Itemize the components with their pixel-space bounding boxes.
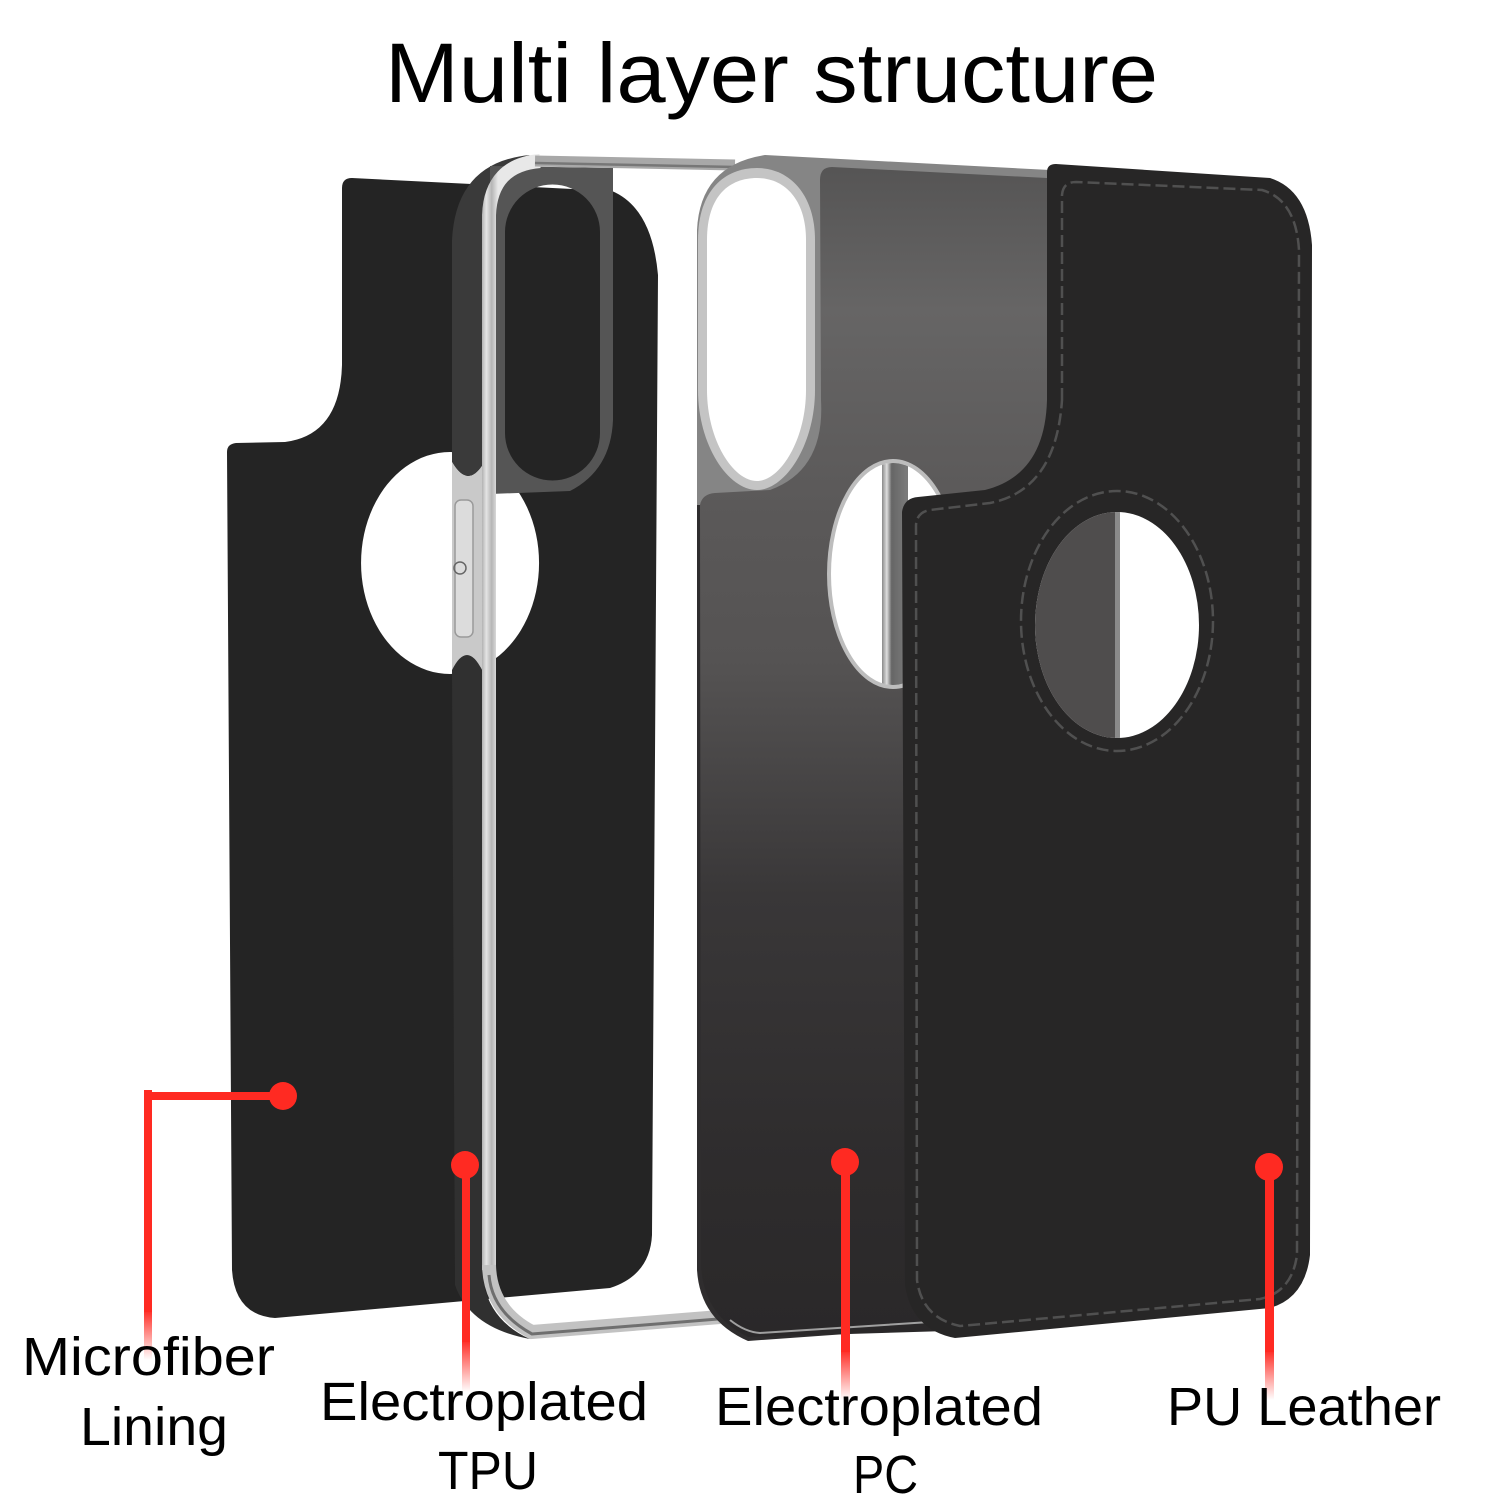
label: Electroplated TPU: TPU (438, 1441, 538, 1500)
label: Electroplated PC: Electroplated (715, 1377, 1043, 1437)
panel: PU leather layer (902, 164, 1312, 1338)
label: PU Leather: PU Leather (1167, 1377, 1441, 1437)
top rail (535, 161, 735, 165)
panel: microfiber lining layer (227, 178, 658, 1318)
camera ring hole with rail seen through (829, 461, 957, 687)
icon: power logo (454, 562, 466, 574)
round opening (1035, 512, 1199, 738)
callout: TPU pointer (451, 1151, 479, 1392)
black frame strip upper (452, 155, 530, 476)
callout: microfiber pointer (144, 1082, 297, 1360)
label: Microfiber Lining (22, 1327, 275, 1457)
label: Electroplated PC (715, 1377, 1043, 1500)
gray back panel (700, 167, 1047, 1337)
metal ring around camera cutout (698, 168, 815, 490)
label: Microfiber Lining: Lining (80, 1397, 228, 1457)
black frame strip lower (452, 655, 530, 1339)
side button (455, 500, 473, 637)
brushed metal base (697, 155, 1050, 520)
stitching (916, 182, 1299, 1326)
panel: electroplated PC layer (697, 155, 1050, 1341)
left edge below camera (697, 505, 930, 1341)
camera plate (490, 166, 613, 494)
camera cutout (707, 178, 806, 481)
callout: PC pointer (831, 1148, 859, 1400)
title: Multi layer structure (385, 26, 1158, 120)
bottom highlight edge (730, 1320, 930, 1333)
silver frame side between strips (452, 462, 482, 670)
stitched ring (1021, 491, 1213, 751)
label: Electroplated TPU: Electroplated (320, 1372, 648, 1432)
panel: electroplated TPU frame layer (452, 155, 735, 1339)
label: Electroplated TPU (320, 1372, 648, 1500)
label: Microfiber Lining: Microfiber (22, 1327, 275, 1387)
callout: PU leather pointer (1255, 1153, 1283, 1400)
silver rail (489, 161, 540, 1270)
